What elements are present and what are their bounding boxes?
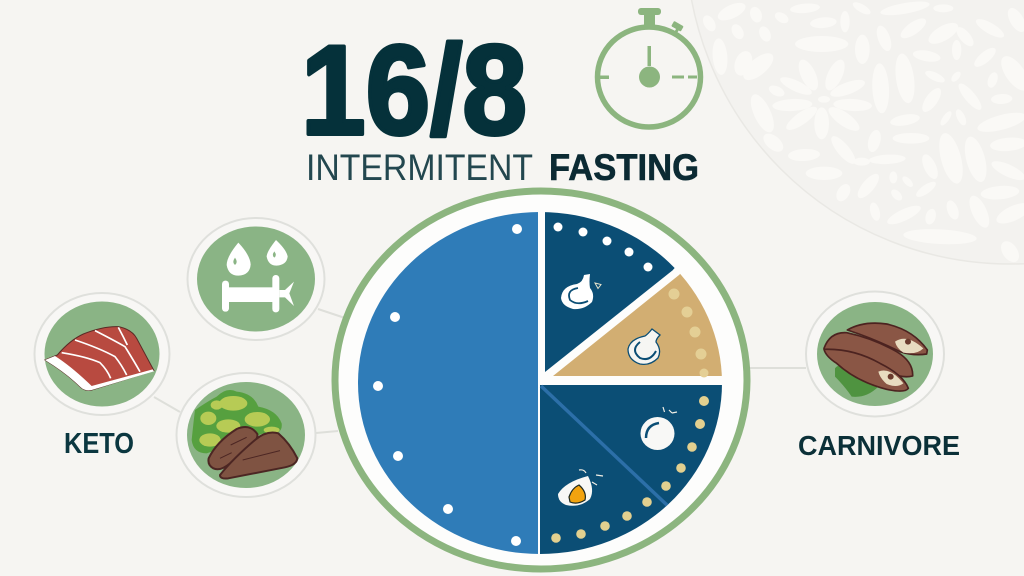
icon: greens [192,390,282,453]
badge: steak and greens [176,373,316,497]
icon: halved egg [558,470,603,506]
badge: keto meat [34,293,170,415]
subtitle: intermittent fasting: INTERMITENT [306,147,533,188]
label: keto: KETO [64,428,134,460]
clock dots: fasting [373,222,652,546]
clock dots: lower slices [551,396,709,543]
outer ring [335,191,747,569]
badge: hydration and exercise [188,218,324,340]
slices [358,212,722,554]
decorative floral panel [686,0,1024,265]
connector lines [154,309,806,433]
subtitle: intermittent fasting: FASTING [549,147,699,188]
badge: carnivore [806,292,944,416]
icon: stopwatch [598,8,700,127]
icon: dumbbell syringe [222,275,294,312]
clock dots: tan slice [668,288,708,378]
icon: water drops [227,240,288,276]
icon: whole egg [640,407,677,450]
pie chart: fasting clock [335,191,747,569]
icon: flask on dark slice [561,274,601,309]
icon: greens [835,366,878,397]
icon: steak slices [208,427,297,479]
title: 16/8: 16/8 [301,19,527,161]
icon: raw meat [45,327,154,390]
subtitle: intermittent fasting [306,147,699,188]
label: carnivore: CARNIVORE [798,430,960,461]
icon: flask on tan slice [628,329,660,364]
icon: meat slices [824,323,927,391]
